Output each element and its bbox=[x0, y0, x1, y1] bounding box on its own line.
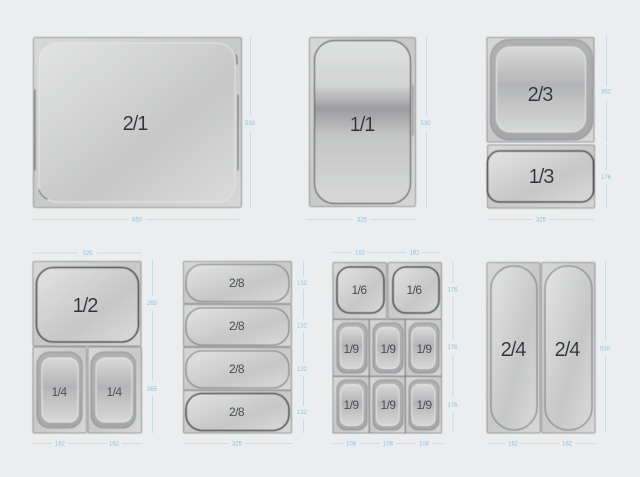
label 1/2: 1/2 bbox=[73, 295, 98, 317]
dimension: 2/8 width 325: 325 bbox=[232, 442, 243, 448]
pan: 1/9 bottom right bbox=[406, 376, 442, 433]
dimension: right grid heights 176: 176 bbox=[447, 345, 458, 351]
pan group: all pans bbox=[33, 38, 595, 433]
dimension: 2/4 height 530: 530 bbox=[600, 346, 611, 352]
dimension: left column height 265 upper bbox=[147, 260, 158, 381]
pan: 2/8 row 3 bbox=[184, 348, 292, 390]
dimension: 1/1 height 530: 530 bbox=[420, 121, 431, 127]
pan: 1/3 bbox=[488, 145, 594, 208]
pan: 2/8 row 4 bbox=[184, 390, 292, 433]
pan: 1/6 left bbox=[333, 262, 386, 319]
dimensions bbox=[32, 36, 612, 448]
label 1/9 top middle: 1/9 bbox=[381, 342, 396, 356]
pan: 2/8 row 2 bbox=[184, 304, 292, 346]
dimension: right grid heights 176 bbox=[447, 262, 458, 433]
dimension: 1/2 width 325: 325 bbox=[82, 251, 93, 257]
size labels bbox=[52, 84, 580, 419]
label 2/4 left: 2/4 bbox=[501, 339, 526, 361]
dimension: 1/4 widths 162 bbox=[33, 442, 141, 448]
dimension: 1/3 height 176 bbox=[601, 145, 612, 208]
dimension: 2/3 1/3 width 325 bbox=[487, 218, 594, 224]
label 1/6 left: 1/6 bbox=[352, 283, 367, 297]
dimension: 1/2 width 325 bbox=[33, 251, 142, 257]
pan: 1/9 top left bbox=[333, 320, 369, 376]
dimension: 1/9 widths 108 bbox=[333, 442, 443, 448]
dimension: 1/1 width 325: 325 bbox=[357, 218, 368, 224]
label 2/8 row 1: 2/8 bbox=[229, 276, 245, 290]
dimension: left column height 265 lower bbox=[147, 387, 158, 433]
pan: 2/1 bbox=[34, 38, 242, 208]
pan: 1/9 bottom left bbox=[333, 376, 369, 433]
label 1/9 bottom middle: 1/9 bbox=[381, 398, 396, 412]
label 2/8 row 2: 2/8 bbox=[229, 319, 245, 333]
dimension: 2/4 widths 162: 162 bbox=[562, 442, 573, 448]
dimension: 2/4 widths 162 bbox=[487, 442, 595, 448]
dimension: 2/1 height 530: 530 bbox=[245, 121, 256, 127]
dimension: 1/4 widths 162: 162 bbox=[109, 442, 120, 448]
dimension: 2/8 heights 132 bbox=[297, 261, 308, 433]
pan: 1/6 right bbox=[388, 262, 442, 319]
pan: 1/9 bottom middle bbox=[370, 376, 405, 433]
dimension: right grid heights 176: 176 bbox=[447, 403, 458, 409]
label 1/9 bottom left: 1/9 bbox=[344, 398, 359, 412]
dimension: 2/3 height 352 bbox=[601, 36, 612, 142]
dimension: right grid heights 176: 176 bbox=[447, 288, 458, 294]
pan: 1/4 left bbox=[33, 347, 86, 433]
label 1/9 top left: 1/9 bbox=[344, 342, 359, 356]
label 2/8 row 4: 2/8 bbox=[229, 405, 245, 419]
dimension: 2/3 height 352: 352 bbox=[601, 90, 612, 96]
label 1/9 bottom right: 1/9 bbox=[417, 398, 432, 412]
label 2/3: 2/3 bbox=[528, 84, 553, 106]
dimension: 2/8 heights 132: 132 bbox=[297, 410, 308, 416]
dimension: 2/8 width 325 bbox=[183, 442, 292, 448]
label 1/6 right: 1/6 bbox=[407, 283, 422, 297]
pan: 2/4 left bbox=[487, 262, 540, 433]
dimension: 1/9 widths 108: 108 bbox=[346, 442, 357, 448]
dimension: left column height 265 upper: 265 bbox=[147, 301, 158, 307]
pan: 2/8 row 1 bbox=[184, 262, 292, 304]
label 1/4 right: 1/4 bbox=[107, 385, 122, 399]
dimension: 1/3 height 176: 176 bbox=[601, 175, 612, 181]
dimension: 1/1 width 325 bbox=[307, 218, 416, 224]
dimension: left column height 265 lower: 265 bbox=[147, 387, 158, 393]
pan: 2/3 bbox=[487, 38, 594, 142]
dimension: 1/6 widths 162: 162 bbox=[355, 250, 366, 256]
dimension: 1/6 widths 162 bbox=[333, 250, 441, 256]
pan: 1/1 bbox=[310, 38, 416, 206]
label 2/4 right: 2/4 bbox=[555, 339, 580, 361]
pan: 1/4 right bbox=[88, 347, 142, 433]
label 1/1: 1/1 bbox=[350, 114, 375, 136]
dimension: 1/9 widths 108: 108 bbox=[383, 442, 394, 448]
dimension: 2/4 widths 162: 162 bbox=[508, 442, 519, 448]
dimension: 2/8 heights 132: 132 bbox=[297, 367, 308, 373]
label 1/4 left: 1/4 bbox=[52, 385, 67, 399]
label 1/3: 1/3 bbox=[529, 166, 554, 188]
pan: 1/9 top right bbox=[406, 320, 442, 376]
dimension: 2/8 heights 132: 132 bbox=[297, 324, 308, 330]
dimension: 1/6 widths 162: 162 bbox=[409, 250, 420, 256]
dimension: 1/4 widths 162: 162 bbox=[55, 442, 66, 448]
dimension: 2/1 width 650: 650 bbox=[132, 218, 143, 224]
dimension: 2/3 1/3 width 325: 325 bbox=[536, 218, 547, 224]
pan: 2/4 right bbox=[542, 262, 595, 433]
dimension: 1/9 widths 108: 108 bbox=[419, 442, 430, 448]
label 2/1: 2/1 bbox=[123, 113, 148, 135]
dimension: 2/8 heights 132: 132 bbox=[297, 281, 308, 287]
pan: 1/9 top middle bbox=[370, 320, 405, 376]
label 2/8 row 3: 2/8 bbox=[229, 362, 245, 376]
pan: 1/2 bbox=[33, 262, 141, 346]
label 1/9 top right: 1/9 bbox=[417, 342, 432, 356]
